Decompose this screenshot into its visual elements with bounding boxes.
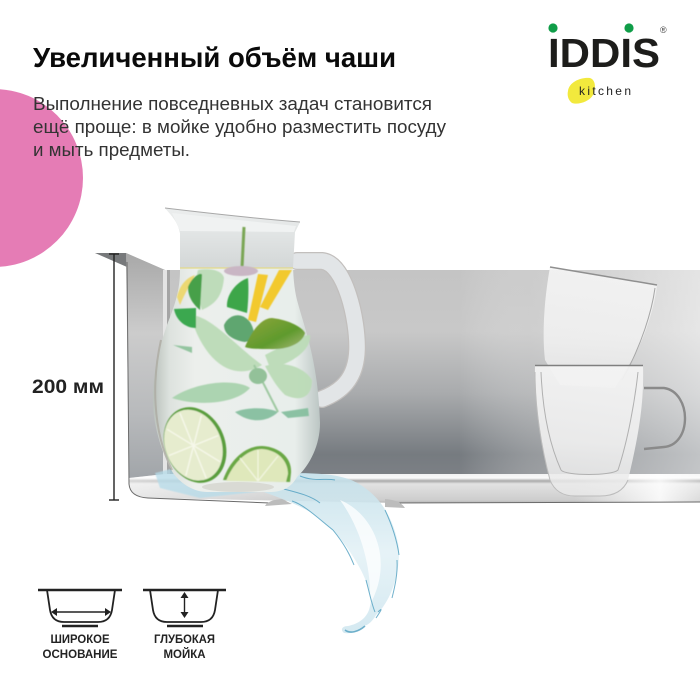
back wall: [165, 270, 700, 475]
sink outline: [127, 262, 700, 503]
logo green dots: [548, 23, 634, 33]
sink feet: [265, 499, 405, 508]
label: wide base: [42, 632, 118, 661]
description text: Выполнение повседневных задач становится: [33, 94, 432, 114]
label: wide base: ШИРОКОЕ: [50, 632, 110, 646]
upper cup rim: [550, 267, 657, 285]
lower cup rim: [535, 364, 643, 366]
glass cups: [535, 267, 685, 496]
lower cup inner wall: [541, 372, 638, 474]
sink floor: [129, 474, 700, 503]
flower at surface: [224, 266, 258, 276]
dimension label: 200 мм: [32, 377, 104, 398]
pink circle: [0, 89, 83, 267]
lime slice large: [153, 398, 237, 492]
label: deep sink: МОЙКА: [164, 646, 206, 661]
icon: deep sink: [143, 590, 226, 626]
label: deep sink: ГЛУБОКАЯ: [154, 632, 215, 646]
icon: wide base sink: [38, 590, 122, 626]
cup handle: [644, 388, 685, 449]
sink cross-section: [95, 253, 700, 508]
dark lime wedge: [245, 318, 305, 349]
upper cup: [544, 267, 657, 388]
pale leaves: [172, 269, 312, 420]
water splash: [155, 468, 399, 633]
mint stem: [242, 227, 244, 268]
glass jug: [153, 208, 357, 492]
kitchen word: kitchen: [579, 84, 631, 98]
top flange: [95, 253, 165, 278]
jug upper glass: [165, 208, 300, 268]
label: wide base: ОСНОВАНИЕ: [42, 647, 118, 661]
registered mark: ®: [660, 25, 667, 35]
label: deep sink: [154, 632, 215, 661]
description text: и мыть предметы.: [33, 140, 190, 160]
lower cup: [535, 365, 643, 496]
dimension line: 200 mm: [109, 254, 119, 500]
splash highlights: [340, 500, 381, 606]
splash streaks: [280, 476, 399, 632]
water on floor left: [155, 468, 265, 498]
title: Увеличенный объём чаши: [33, 42, 396, 73]
description text: [33, 94, 446, 160]
lemon slices: [177, 270, 292, 322]
jug edge highlights: [155, 340, 172, 470]
logo: IDDIS kitchen: [548, 23, 667, 104]
falling water: [258, 473, 399, 633]
jug handle: [297, 261, 357, 399]
jug body: [153, 208, 320, 492]
logo wordmark: IDDIS: [548, 30, 660, 76]
left wall: [126, 253, 165, 482]
jug base: [202, 482, 274, 492]
lime slice small: [223, 446, 291, 482]
green leaves: [174, 274, 254, 342]
yellow blob: [568, 78, 595, 104]
description text: ещё проще: в мойке удобно разместить посуду: [33, 117, 446, 137]
jug contents: [153, 227, 312, 492]
